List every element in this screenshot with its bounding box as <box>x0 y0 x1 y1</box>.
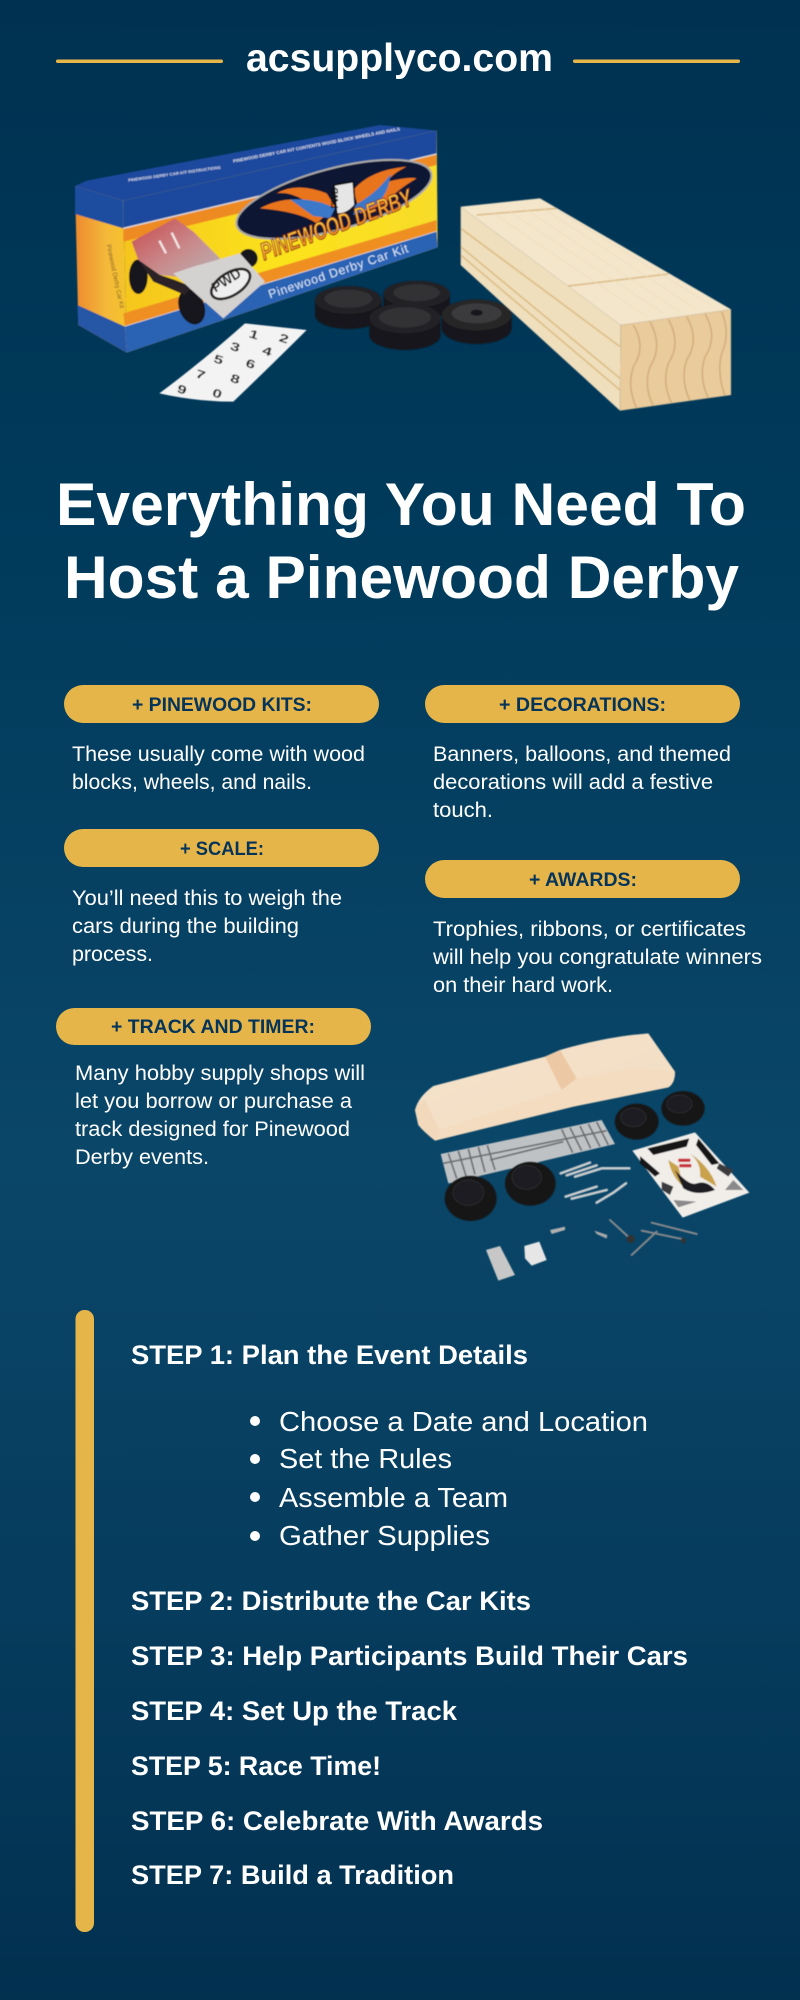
title: Host a Pinewood Derby <box>64 544 740 611</box>
item: scale: cars during the building <box>72 915 299 938</box>
box <box>75 125 439 353</box>
logo oval: PWD <box>330 187 341 209</box>
number sheet: 8 <box>229 372 241 387</box>
number sheet: 4 <box>261 344 273 360</box>
item: track and timer: let you borrow or purchase a <box>75 1090 352 1113</box>
item: awards: + AWARDS: <box>529 870 637 891</box>
front wheels <box>445 1162 556 1221</box>
wood block <box>461 198 731 411</box>
item: decorations <box>425 685 740 822</box>
step 1 with bullets: STEP 1: Plan the Event Details <box>131 1340 528 1370</box>
box: Pinewood Derby Car Kit <box>105 244 125 309</box>
axle clips and nails <box>550 1163 697 1255</box>
item: scale <box>64 829 379 966</box>
box: PINEWOOD DERBY CAR KIT INSTRUCTIONS <box>128 165 221 183</box>
item: decorations: Banners, balloons, and themed <box>433 743 731 766</box>
number sheet <box>159 323 307 402</box>
step 2: STEP 2: Distribute the Car Kits <box>131 1586 531 1616</box>
step 1 with bullets <box>131 1340 648 1551</box>
wooden car body <box>415 1033 675 1141</box>
item: decorations: + DECORATIONS: <box>499 695 666 716</box>
decal sheet <box>632 1132 749 1218</box>
title <box>56 471 746 611</box>
image: pinewood derby kit box, wheels and wood block <box>75 125 731 411</box>
item: awards <box>425 860 762 997</box>
item: pinewood kits: + PINEWOOD KITS: <box>132 695 312 716</box>
image: car kit parts <box>415 1033 749 1281</box>
step 1 with bullets: Set the Rules <box>279 1443 452 1474</box>
item: awards: will help you congratulate winners <box>432 946 762 969</box>
number sheet: 1 <box>247 328 260 343</box>
number sheet: 5 <box>212 353 225 368</box>
item: pinewood kits: These usually come with wood <box>72 743 365 766</box>
number sheet: 7 <box>194 368 207 383</box>
number sheet: 9 <box>175 383 188 398</box>
item: track and timer <box>56 1008 371 1169</box>
kit box, number sheet and wheels <box>75 125 512 402</box>
item: track and timer: + TRACK AND TIMER: <box>111 1017 315 1038</box>
item: scale: + SCALE: <box>180 839 264 860</box>
number sheet: 2 <box>277 332 290 347</box>
logo oval <box>229 144 439 266</box>
step 4: STEP 4: Set Up the Track <box>131 1696 458 1726</box>
item: scale: You’ll need this to weigh the <box>72 887 342 910</box>
step 1 with bullets: Choose a Date and Location <box>279 1406 648 1437</box>
item: pinewood kits <box>64 685 379 794</box>
steps side bar <box>76 1310 94 1932</box>
item: awards: Trophies, ribbons, or certificates <box>433 918 746 941</box>
logo oval: PINEWOOD DERBY <box>257 184 418 266</box>
step 1 with bullets: Assemble a Team <box>279 1482 508 1513</box>
item: scale: process. <box>72 943 153 966</box>
box: Pinewood Derby Car Kit <box>266 241 410 302</box>
number sheet: 3 <box>229 340 241 355</box>
item: track and timer: Many hobby supply shops will <box>75 1062 365 1085</box>
step 5: STEP 5: Race Time! <box>131 1751 381 1781</box>
title: Everything You Need To <box>56 471 746 538</box>
number sheet: 0 <box>211 387 223 402</box>
box: PINEWOOD DERBY CAR KIT CONTENTS WOOD BLOCK WHEELS AND NAILS <box>233 126 400 164</box>
weights <box>486 1242 547 1281</box>
wheels <box>315 281 512 350</box>
rear wheels <box>615 1091 705 1140</box>
header: website with rules <box>56 37 740 80</box>
item: track and timer: Derby events. <box>75 1146 209 1169</box>
item: awards: on their hard work. <box>433 974 613 997</box>
item: decorations: touch. <box>433 799 493 822</box>
item: track and timer: track designed for Pinewood <box>75 1118 350 1141</box>
car on box: PWD <box>208 265 244 295</box>
header: website with rules: acsupplyco.com <box>246 37 553 80</box>
step 3: STEP 3: Help Participants Build Their Cars <box>131 1641 688 1671</box>
axle plate <box>441 1120 615 1183</box>
item: pinewood kits: blocks, wheels, and nails. <box>72 771 312 794</box>
car on box <box>129 218 265 328</box>
step 6: STEP 6: Celebrate With Awards <box>131 1806 543 1836</box>
number sheet: 6 <box>244 357 257 372</box>
item: decorations: decorations will add a festive <box>433 771 713 794</box>
step 7: STEP 7: Build a Tradition <box>131 1860 454 1890</box>
step 1 with bullets: Gather Supplies <box>279 1520 490 1551</box>
